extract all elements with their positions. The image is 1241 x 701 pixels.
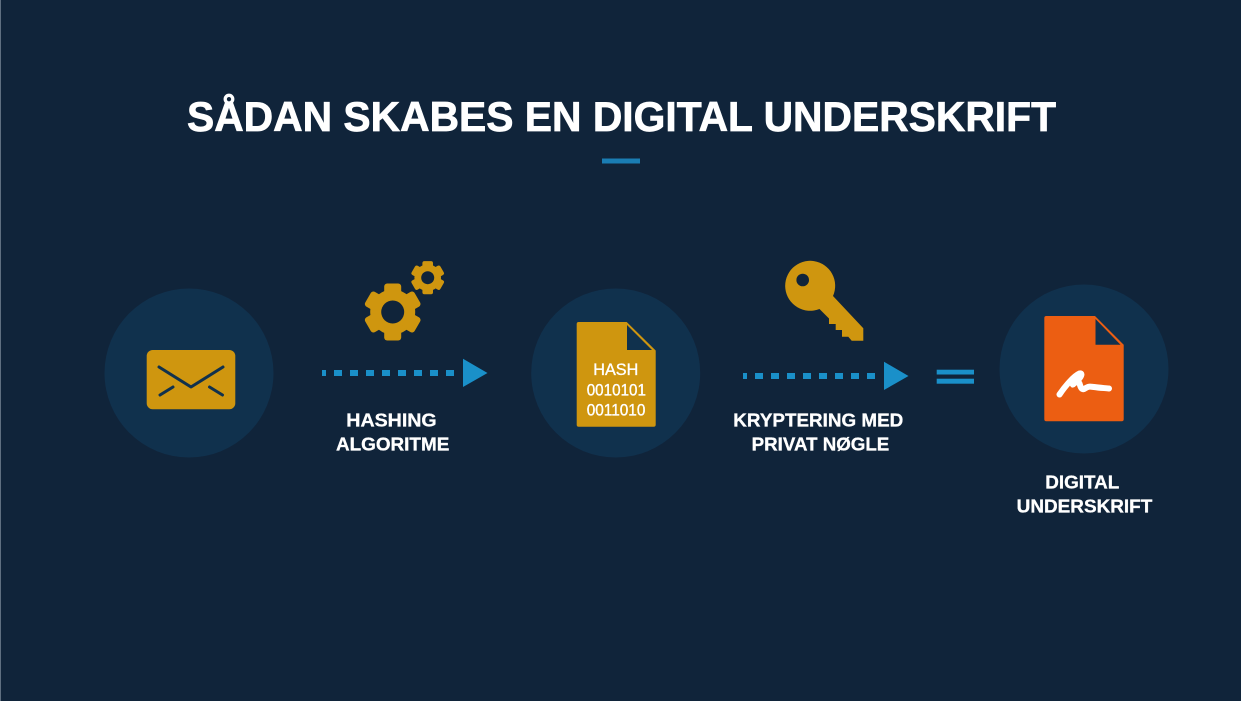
signature stroke	[1060, 373, 1109, 394]
label: hashing algoritme: ALGORITME	[336, 435, 449, 455]
label: kryptering med privat nøgle: PRIVAT NØGLE	[752, 435, 889, 455]
label: digital underskrift: UNDERSKRIFT	[1017, 497, 1152, 517]
icon: hash document	[577, 322, 656, 427]
label: kryptering med privat nøgle	[733, 411, 903, 455]
icon: hash document: 0011010	[587, 402, 645, 420]
icon: signed document	[1044, 316, 1124, 421]
icon: hash document: 0010101	[587, 381, 646, 399]
icon: hash document: HASH	[593, 361, 638, 379]
arrow: kryptering	[743, 362, 908, 390]
icon: envelope	[147, 350, 235, 409]
icon: key	[785, 261, 863, 341]
panel: signature circle	[1000, 284, 1168, 454]
icon: gears	[364, 261, 445, 340]
label: hashing algoritme	[336, 411, 449, 455]
label: digital underskrift	[1017, 472, 1152, 517]
panel: email circle	[104, 288, 274, 458]
label: hashing algoritme: HASHING	[346, 411, 437, 431]
arrow: hashing	[322, 359, 488, 387]
icon: equals sign	[937, 370, 974, 384]
label: digital underskrift: DIGITAL	[1045, 472, 1119, 492]
title: SÅDAN SKABES EN DIGITAL UNDERSKRIFT	[187, 93, 1056, 140]
panel: hash circle	[531, 288, 700, 458]
label: kryptering med privat nøgle: KRYPTERING MED	[733, 411, 903, 431]
